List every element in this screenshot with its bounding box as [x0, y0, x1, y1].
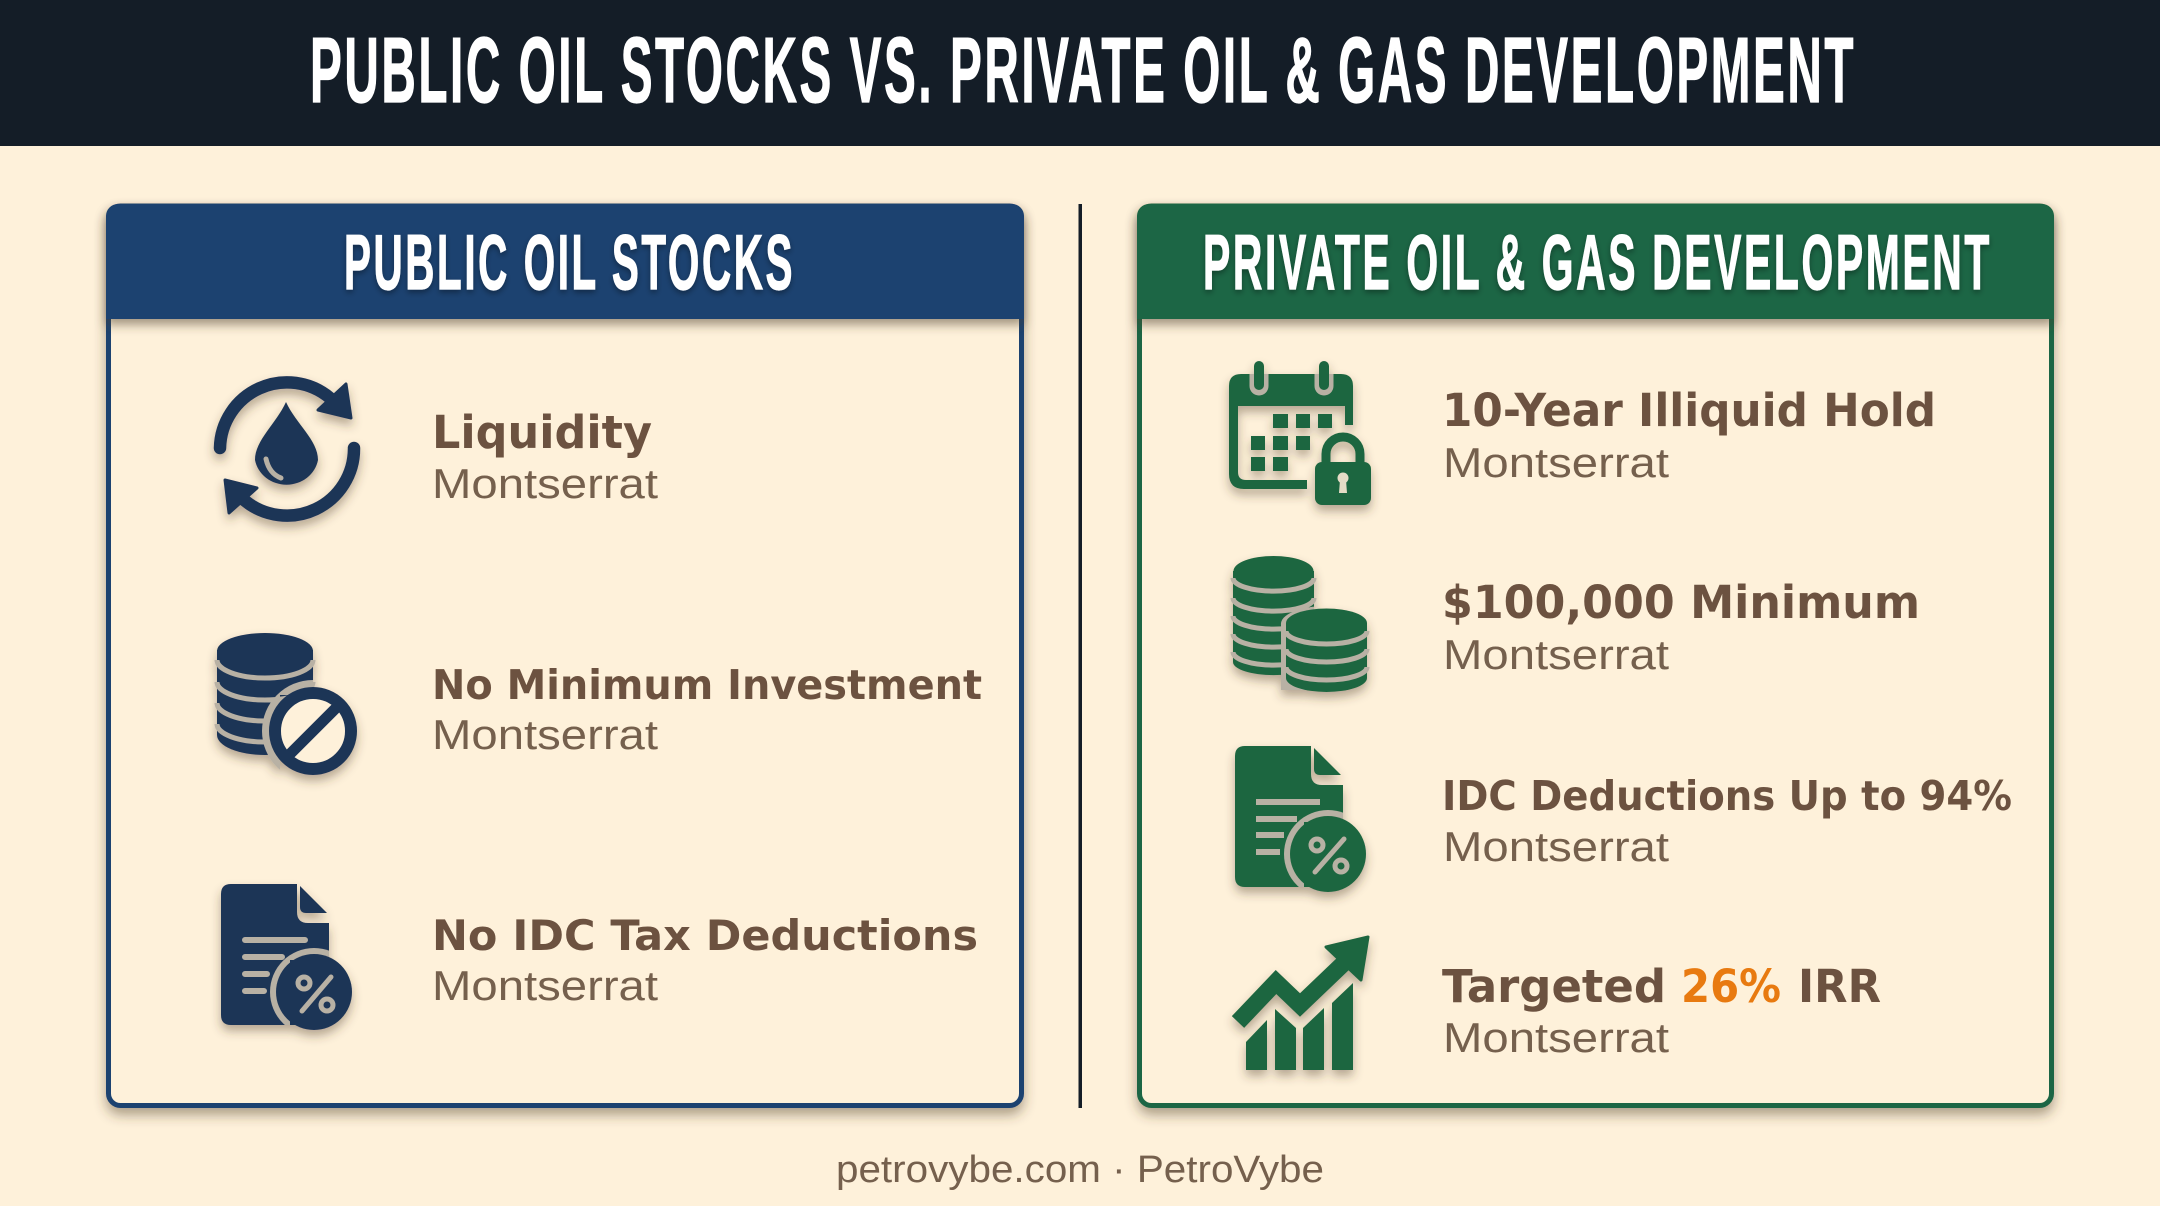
- text: targeted 26% irr: 26%: [1681, 960, 1781, 1013]
- text: liquidity: Liquidity: [432, 406, 652, 459]
- panel: private oil and gas development: [1137, 204, 2054, 1106]
- text: idc deductions: [1442, 772, 2012, 870]
- divider: [1078, 204, 1082, 1108]
- text: no minimum investment: [432, 661, 982, 758]
- text: no minimum investment: Montserrat: [432, 711, 658, 758]
- title banner: [0, 0, 2160, 146]
- icon: coin stacks: [1233, 556, 1372, 692]
- text: no idc tax deductions: Montserrat: [432, 962, 658, 1009]
- text: 100,000 minimum: [1442, 576, 1920, 678]
- text: idc deductions: IDC Deductions Up to 94%: [1442, 772, 2012, 820]
- text: idc deductions: Montserrat: [1443, 823, 1669, 870]
- text: liquidity: [432, 406, 658, 507]
- text: targeted 26% irr: IRR: [1798, 960, 1881, 1013]
- icon: calendar with lock: [1229, 363, 1371, 505]
- text: targeted 26% irr: Montserrat: [1443, 1014, 1669, 1061]
- text: targeted 26% irr: [1442, 960, 1881, 1061]
- text: no minimum investment: No Minimum Investment: [432, 661, 982, 709]
- text: 100,000 minimum: Montserrat: [1443, 631, 1669, 678]
- icon: growth chart: [1238, 937, 1368, 1070]
- icon: liquidity: [220, 382, 354, 516]
- text: targeted 26% irr: Targeted: [1442, 960, 1666, 1013]
- header: public oil stocks: [106, 204, 1024, 319]
- icon: tax document: [1235, 746, 1372, 898]
- text: no idc tax deductions: [432, 911, 978, 1009]
- header: private oil and gas development: [1137, 204, 2054, 319]
- icon: tax document: [221, 884, 358, 1036]
- text: 10-year illiquid hold: 10-Year Illiquid Hold: [1442, 384, 1936, 437]
- text: 100,000 minimum: $100,000 Minimum: [1442, 576, 1920, 629]
- text: 10-year illiquid hold: [1442, 384, 1936, 486]
- header: public oil stocks: PUBLIC OIL STOCKS: [344, 218, 795, 306]
- panel: public oil stocks: [106, 204, 1024, 1106]
- icon: coin stack with ban sign: [217, 633, 364, 782]
- footer: petrovybe.com · PetroVybe: [836, 1149, 1324, 1191]
- text: liquidity: Montserrat: [432, 460, 658, 507]
- text: 10-year illiquid hold: Montserrat: [1443, 439, 1669, 486]
- text: no idc tax deductions: No IDC Tax Deductions: [432, 911, 978, 960]
